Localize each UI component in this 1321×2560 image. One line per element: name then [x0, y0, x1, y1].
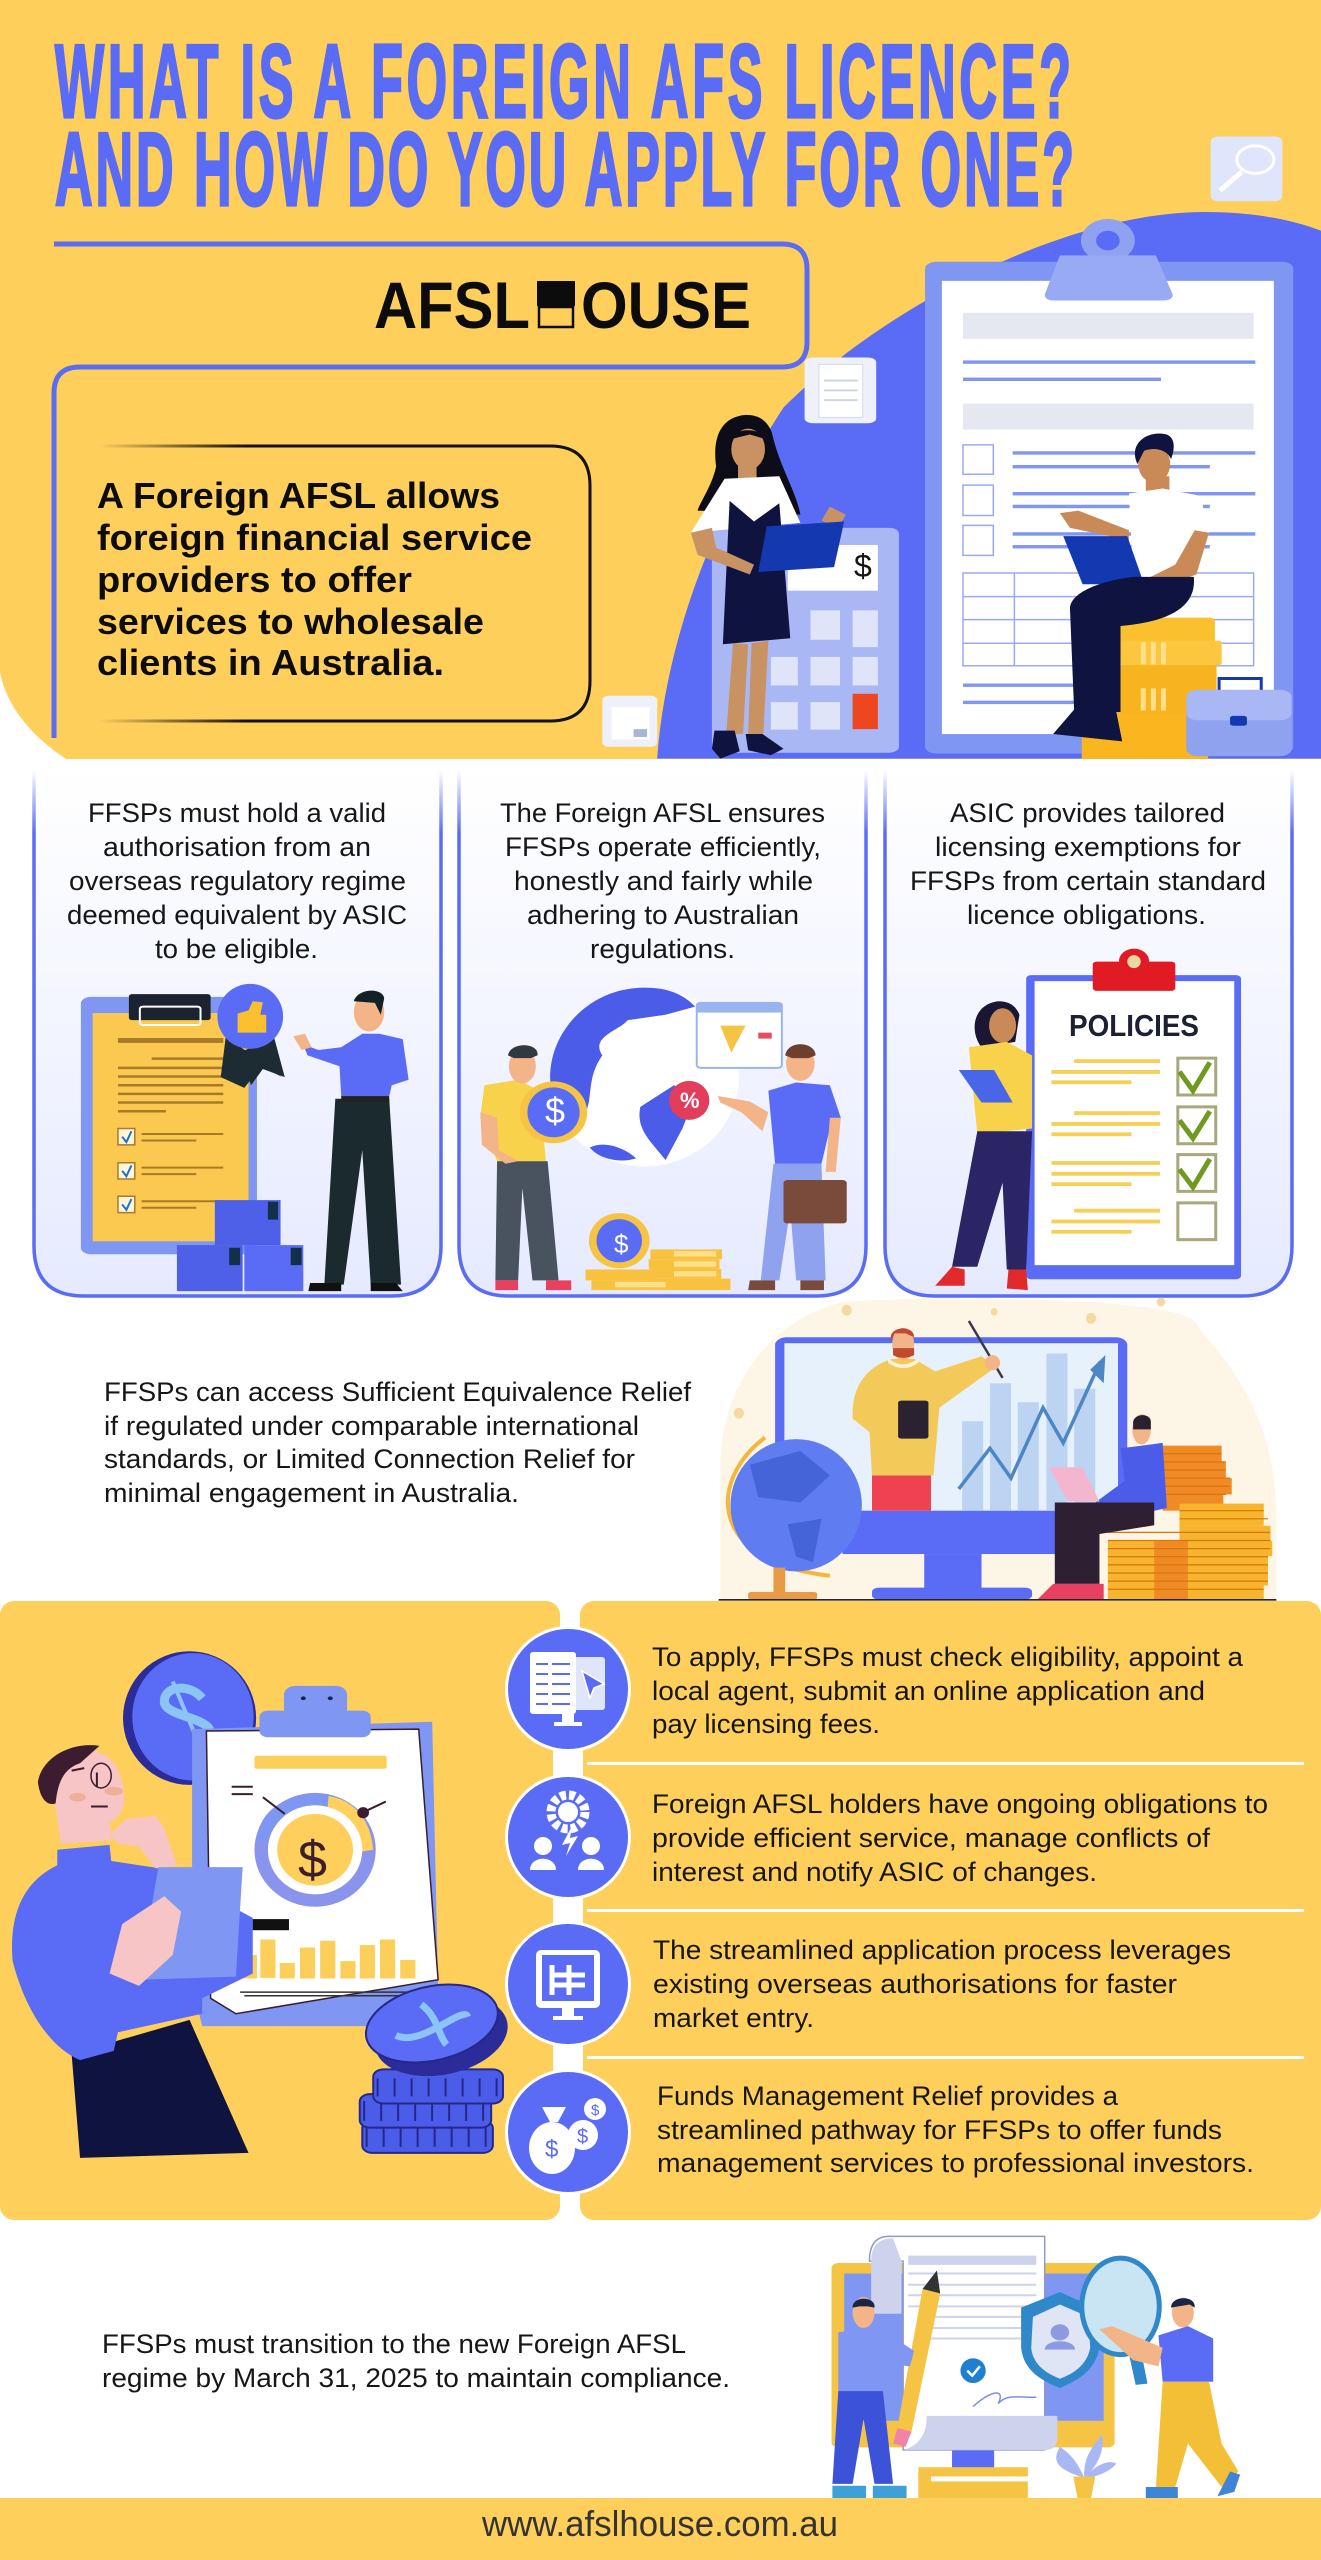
coin stacks [1108, 1446, 1272, 1599]
briefcase [1186, 679, 1292, 756]
card 3 text: FFSPs from certain standard [910, 866, 1266, 896]
logo: AFSL HOUSE: OUSE [581, 268, 751, 342]
heading [55, 25, 1074, 228]
dividers [587, 1762, 1304, 2059]
card 2 text [500, 798, 825, 964]
plant [1056, 2434, 1116, 2498]
card 3 text [910, 798, 1266, 930]
check rows [1051, 1059, 1160, 1234]
callout: foreign AFSL definition: providers to offer [97, 559, 412, 600]
callout: foreign AFSL definition [97, 446, 590, 721]
card 1 text: authorisation from an [103, 832, 371, 862]
icon: money bag and coins [529, 2098, 606, 2174]
header illustration: clipboard, woman and man [602, 136, 1321, 759]
globe on stand [728, 1438, 862, 1600]
card 1 text [67, 798, 407, 964]
step circles [505, 1626, 631, 2195]
dollar signs and percent [545, 1088, 700, 1259]
card 3 text: licensing exemptions for [935, 832, 1241, 862]
bars and arrow [959, 1353, 1105, 1511]
heading: AND HOW DO YOU APPLY FOR ONE? [55, 113, 1074, 228]
callout: foreign AFSL definition: clients in Australia. [97, 642, 444, 683]
icon: form on monitor [530, 1652, 605, 1726]
document [869, 2236, 1057, 2450]
icon: flowchart on monitor [536, 1950, 600, 2020]
panel: right yellow with steps [505, 1601, 1321, 2220]
card 2 text: regulations. [590, 934, 735, 964]
illustration: presenter with chart [719, 1298, 1276, 1601]
card 1 illustration [81, 984, 409, 1291]
text: relief paragraph: FFSPs can access Sufficient Equivalence Relief [104, 1377, 692, 1407]
shield [1021, 2292, 1099, 2388]
man sitting with laptop [1053, 433, 1209, 741]
panel: card 1 [34, 770, 441, 1296]
clipboard [925, 219, 1293, 754]
monitor [832, 2263, 1115, 2498]
coins under man [1082, 618, 1222, 759]
text: relief paragraph: standards, or Limited Connection Relief for [104, 1444, 635, 1474]
card 2 illustration [480, 988, 847, 1290]
step 3 text [653, 1935, 1231, 2033]
big coin [123, 1651, 256, 1785]
callout: foreign AFSL definition: A Foreign AFSL allows [97, 475, 500, 516]
step 4 text: Funds Management Relief provides a [657, 2081, 1119, 2111]
clipboard with chart [192, 1686, 438, 2026]
badge [217, 984, 285, 1088]
card 1 text: deemed equivalent by ASIC [67, 900, 407, 930]
magnifier [1082, 2258, 1159, 2385]
dollar signs and percent: $ [545, 1090, 565, 1131]
logo: AFSL HOUSE [374, 268, 751, 342]
footer bar: www.afslhouse.com.au [481, 2503, 838, 2544]
step 3 text: The streamlined application process leverages [653, 1935, 1231, 1965]
policies label: POLICIES [1069, 1008, 1199, 1043]
icon: magnifier card [1211, 136, 1282, 201]
dollar signs and percent: $ [614, 1229, 629, 1259]
text: relief paragraph: if regulated under comparable international [104, 1411, 639, 1441]
card 3 text: ASIC provides tailored [950, 798, 1225, 828]
card 2 text: adhering to Australian [527, 900, 799, 930]
card 2 text: The Foreign AFSL ensures [500, 798, 825, 828]
boxes [177, 1200, 303, 1291]
panel: card 3 [885, 770, 1292, 1296]
step 4 text [657, 2081, 1254, 2178]
pencil [893, 2270, 940, 2447]
yellow header background [0, 0, 1321, 759]
woman with tablet [935, 1001, 1032, 1290]
icon: folder card [602, 696, 657, 747]
card 1 text: FFSPs must hold a valid [88, 798, 386, 828]
logo: AFSL HOUSE: AFSL [374, 268, 530, 342]
monitor [775, 1337, 1127, 1600]
step 4 text: management services to professional investors. [657, 2148, 1254, 2178]
dollar signs and percent: % [680, 1088, 700, 1113]
calculator dollar sign: $ [854, 548, 872, 584]
icon: money bag and coins: $ [545, 2136, 558, 2163]
card 2 text: FFSPs operate efficiently, [505, 832, 821, 862]
blue blob [657, 212, 1321, 759]
text: relief paragraph: minimal engagement in Australia. [104, 1478, 519, 1508]
card 1 text: to be eligible. [155, 934, 318, 964]
step 2 text [652, 1789, 1268, 1887]
text: transition deadline: regime by March 31, 2025 to maintain compliance. [102, 2363, 730, 2393]
chart window [697, 1003, 782, 1068]
step 3 text: existing overseas authorisations for faster [653, 1969, 1177, 1999]
footer bar [0, 2498, 1321, 2560]
cream blob [720, 1299, 1276, 1600]
header frame line [54, 244, 807, 738]
card 3 illustration: policies clipboard [935, 949, 1241, 1290]
step 2 text: interest and notify ASIC of changes. [652, 1857, 1097, 1887]
text: transition deadline: FFSPs must transition to the new Foreign AFSL [102, 2329, 686, 2359]
coin and stacks [586, 1213, 730, 1290]
icon: document card [805, 357, 876, 423]
thinking man [12, 1745, 289, 2158]
panel: left yellow with analyst illustration [0, 1601, 560, 2220]
card 3 text: licence obligations. [967, 900, 1206, 930]
man pointing [293, 991, 409, 1291]
heading: WHAT IS A FOREIGN AFS LICENCE? [55, 25, 1071, 140]
text: transition deadline [102, 2329, 730, 2393]
man with coin [480, 1045, 587, 1290]
icon: team and gear [530, 1795, 604, 1870]
panel: card 2 [459, 770, 866, 1296]
icon: money bag and coins: $ [577, 2126, 588, 2148]
step 3 text: market entry. [653, 2003, 814, 2033]
icon: money bag and coins: $ [591, 2102, 600, 2119]
step 2 text: provide efficient service, manage conflicts of [652, 1823, 1211, 1853]
step 1 text: pay licensing fees. [652, 1709, 880, 1739]
callout: foreign AFSL definition: services to wholesale [97, 601, 484, 642]
globe [550, 988, 739, 1166]
step 2 text: Foreign AFSL holders have ongoing obligations to [652, 1789, 1268, 1819]
calculator [712, 528, 899, 753]
seated man with laptop [1038, 1414, 1167, 1599]
text: relief paragraph [104, 1377, 692, 1508]
woman with magnifier [1099, 2298, 1240, 2498]
step 1 text: local agent, submit an online application and [652, 1676, 1205, 1706]
woman with laptop [691, 415, 846, 759]
decorative dots [734, 1298, 1165, 1419]
callout: foreign AFSL definition: foreign financial service [97, 517, 532, 558]
step 1 text: To apply, FFSPs must check eligibility, appoint a [652, 1642, 1244, 1672]
man with briefcase [718, 1044, 847, 1290]
step 4 text: streamlined pathway for FFSPs to offer funds [657, 2115, 1222, 2145]
card 2 text: honestly and fairly while [514, 866, 813, 896]
man with pencil [832, 2297, 914, 2498]
percent badge [669, 1081, 709, 1120]
coin stack [349, 1969, 526, 2153]
big dollar sign on chart: $ [298, 1831, 327, 1889]
card 1 text: overseas regulatory regime [69, 866, 406, 896]
analyst illustration [12, 1651, 526, 2158]
step 1 text [652, 1642, 1244, 1739]
illustration: document, shield and magnifier [832, 2236, 1240, 2498]
presenter [853, 1321, 1003, 1511]
